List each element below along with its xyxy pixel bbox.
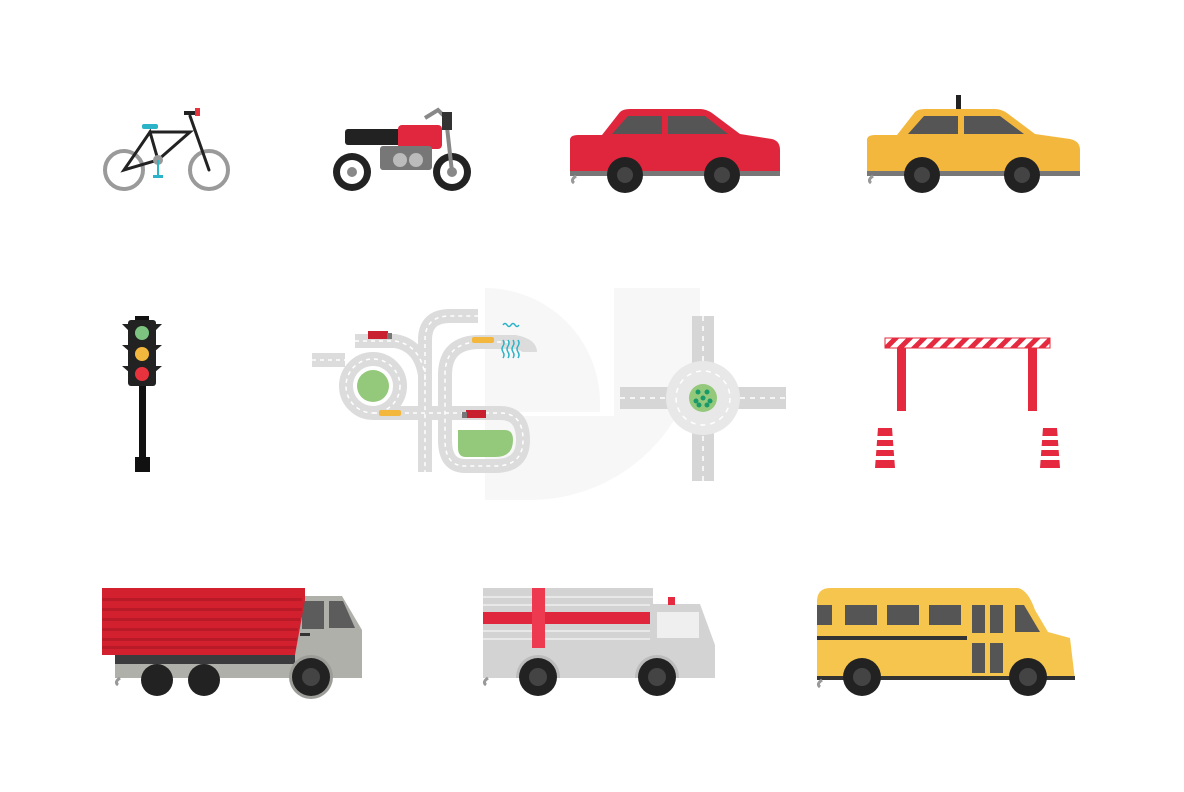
icon: taxi xyxy=(867,95,1080,193)
icon: truck xyxy=(102,588,362,699)
icon: red car xyxy=(570,109,780,193)
road map xyxy=(312,316,530,472)
barrier xyxy=(875,338,1060,468)
icon: bicycle xyxy=(105,108,228,189)
icon: motorcycle xyxy=(333,110,471,191)
background logo shape xyxy=(485,288,700,500)
roundabout xyxy=(620,316,786,481)
icon: traffic light xyxy=(122,316,162,472)
icon: school bus xyxy=(817,588,1075,696)
icon: ambulance xyxy=(483,588,715,703)
